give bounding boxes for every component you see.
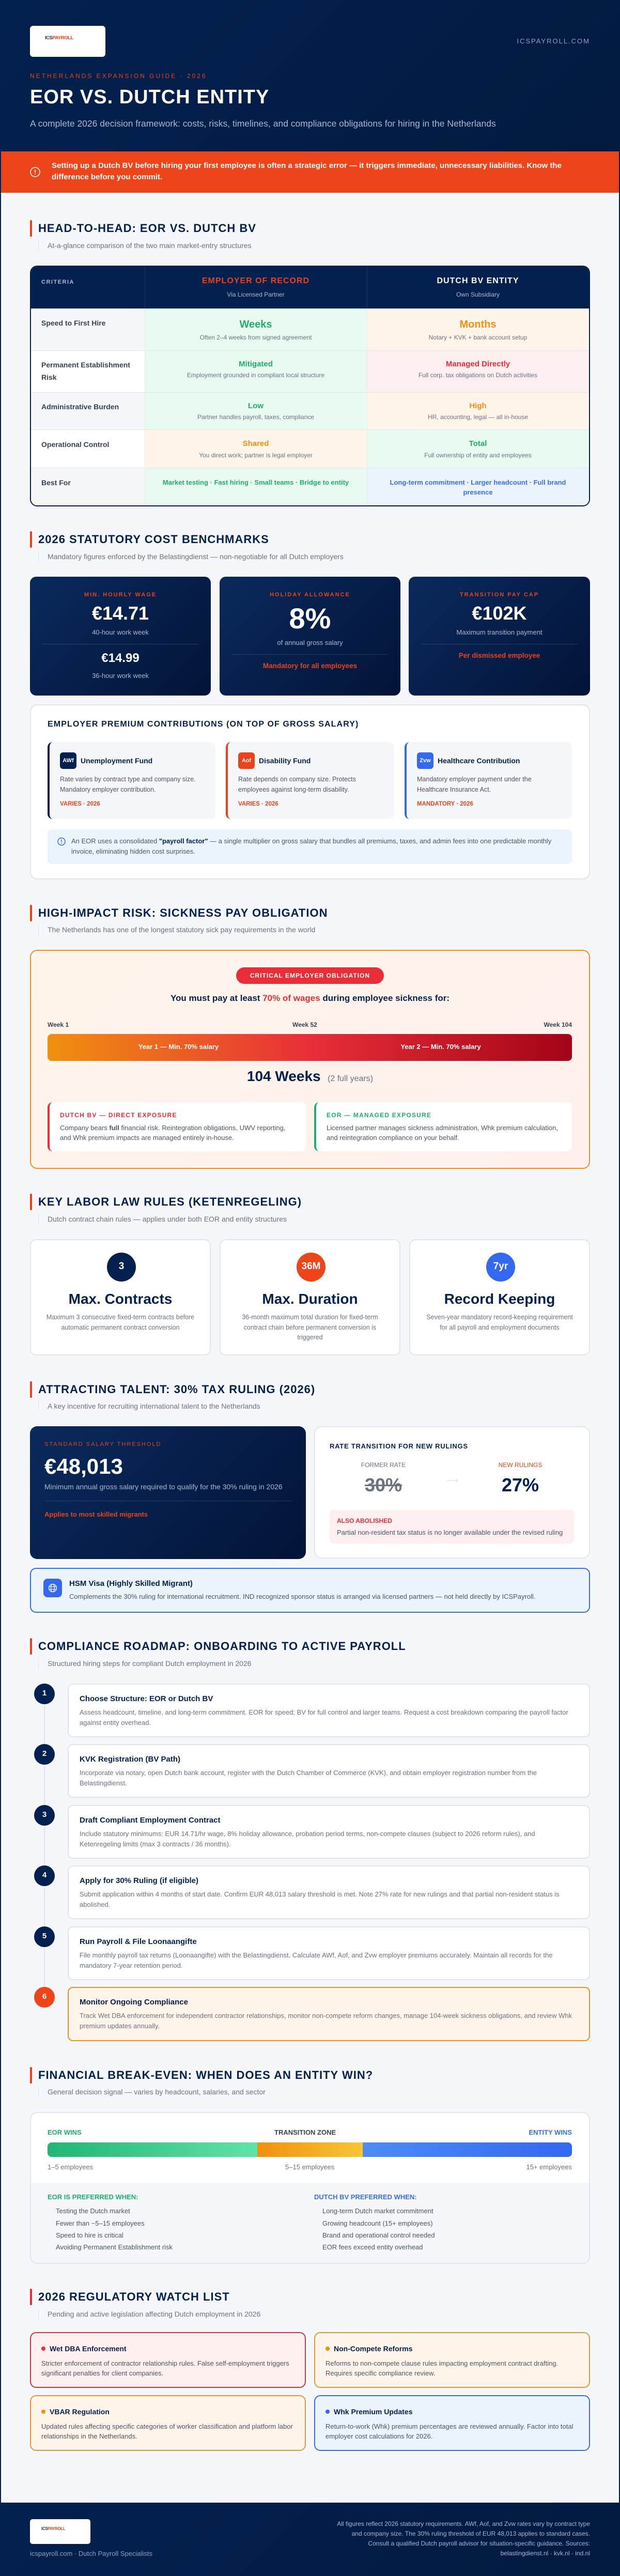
cell: best for entity: Long-term commitment · Larger headcount · Full brand [390,479,566,486]
premium card: AWf: VARIES · 2026 [60,801,100,807]
note: payroll factor: invoice, eliminating hidden cost surprises. [71,847,195,855]
step 3 number [34,1805,55,1826]
header: employer of record: Via Licensed Partner [227,291,285,298]
cell: best for entity: presence [463,488,493,496]
cell: high [367,393,589,430]
former rate: FORMER RATE [361,1461,406,1469]
badge: AWf [60,752,76,769]
premium card: Zvw [405,742,572,819]
cell: high: HR, accounting, legal — all in-house [428,413,528,421]
step 4 card: Apply for 30% Ruling (if eligible) [80,1876,198,1885]
stat card: min hourly wage: MIN. HOURLY WAGE [84,592,157,598]
row label: best for: Best For [41,479,71,487]
watch card: Whk: Whk Premium Updates [334,2408,412,2416]
cell: best for EOR: Market testing · Fast hiring · Small teams · Bridge to entity [163,479,349,486]
cell: managed directly: Full corp. tax obligations on Dutch activities [419,372,537,379]
step 6 card [68,1987,590,2041]
table header row [31,267,589,308]
cell: total [367,430,589,468]
rule card: max duration: 36-month maximum total duration for fixed-term [242,1314,378,1321]
callout: also abolished: ALSO ABOLISHED [337,1517,392,1524]
scale labels [48,2128,572,2136]
watch card: Wet DBA: Wet DBA Enforcement [50,2344,127,2353]
watch card: non-compete: Non-Compete Reforms [334,2344,412,2353]
timeline bar [48,1034,572,1061]
stat card: holiday allowance [220,577,400,696]
heading: statutory cost benchmarks: 2026 STATUTORY COST BENCHMARKS [38,533,269,546]
card: dutch bv exposure: Company bears full financial risk. Reintegration obligations, UWV reporting, [60,1124,285,1132]
card: dutch bv exposure: and Whk premium impacts are managed entirely in-house. [60,1134,234,1142]
row label: control: Operational Control [41,440,109,449]
stat card: min hourly wage: 40-hour work week [92,628,149,636]
EOR preferred list [48,2193,173,2251]
premium card: AWf: Rate varies by contract type and company size. [60,776,196,783]
watch card: VBAR: relationships in the Netherlands. [41,2432,137,2440]
icon: 7yr: 7yr [493,1261,508,1272]
preferred conditions [31,2183,589,2263]
logo [30,26,105,57]
premium card: AWf: Unemployment Fund [81,757,152,765]
EOR preferred list: Speed to hire is critical [56,2231,123,2239]
stat card: transition pay cap: €102K [472,603,527,624]
panel: salary threshold: Applies to most skilled migrants [44,1510,148,1518]
card: dutch bv exposure: DUTCH BV — DIRECT EXPOSURE [60,1112,177,1119]
premium card: Zvw: Healthcare Insurance Act. [417,786,491,793]
footer disclaimer: Consult a qualified Dutch payroll advisor for situation-specific guidance. Sources: [368,2540,590,2547]
threshold value: €48,013 [44,1454,123,1478]
rule card: max duration: triggered [297,1334,323,1341]
footer disclaimer: belastingdienst.nl · kvk.nl · ind.nl [501,2550,590,2557]
cell: low [145,393,367,430]
new rate: NEW RULINGS [499,1461,542,1469]
panel: rate transition: RATE TRANSITION FOR NEW RULINGS [330,1442,468,1450]
EOR preferred list: Testing the Dutch market [56,2207,130,2215]
footer [0,2503,620,2576]
rule card: max duration [220,1239,400,1355]
footer tagline: icspayroll.com · Dutch Payroll Specialists [30,2550,152,2557]
header: employer of record: EMPLOYER OF RECORD [202,276,309,285]
BV preferred list: EOR fees exceed entity overhead [322,2243,423,2251]
step 5 card [68,1926,590,1980]
cell: best for EOR [145,468,367,505]
card: eor exposure [314,1102,572,1151]
step 1 card [68,1684,590,1737]
row label: speed: Speed to First Hire [41,319,105,327]
watch card: Wet DBA: significant penalties for client companies. [41,2369,163,2377]
heading: sickness pay: HIGH-IMPACT RISK: SICKNESS PAY OBLIGATION [38,906,328,919]
step 1 number [34,1684,55,1704]
cell: low: Partner handles payroll, taxes, compliance [197,413,314,421]
stat card: holiday allowance: 8% [289,602,331,635]
step 6 card: Track Wet DBA enforcement for independent contractor relationships, monitor non-compete reform changes, manage 104-week sickness obligations, and review Whk [80,2012,572,2019]
cell: managed directly [367,351,589,392]
icon: 36M: 36M [302,1261,320,1272]
card: eor exposure: EOR — MANAGED EXPOSURE [327,1112,431,1119]
banner text: Setting up a Dutch BV before hiring your first employee is often a strategic error — it triggers immediate, unnecessary liabilities. Know the [52,161,562,170]
cell: total: Full ownership of entity and employees [424,452,532,459]
watch card: VBAR: Updated rules affecting specific categories of worker classification and platform labor [41,2423,293,2430]
step 6 number: 6 [42,1992,47,2001]
premium card: AWf [48,742,215,819]
timeline bar: Year 2 — Min. 70% salary [400,1043,481,1051]
banner text: difference before you commit. [52,173,162,181]
step 3 card [68,1805,590,1859]
step 2 number: 2 [42,1749,47,1758]
badge: Aof: Aof [242,758,251,764]
stat card: holiday allowance: HOLIDAY ALLOWANCE [270,592,350,598]
step 4 number: 4 [42,1871,47,1879]
cell: best for entity [367,468,589,505]
panel: sickness pay obligation [30,950,590,1169]
alert banner [1,151,619,193]
row label: PE risk: Risk [41,373,57,381]
watch card: non-compete: Reforms to non-compete clause rules impacting employment contract drafting. [326,2359,558,2367]
callout: HSM visa: Complements the 30% ruling for international recruitment. IND recognized sponsor status is arranged via licensed partners — not held directly by ICSPayroll. [69,1593,535,1600]
watch card: Wet DBA: Stricter enforcement of contractor relationship rules. False self-employment triggers [41,2359,289,2367]
section subtitle: A key incentive for recruiting international talent to the Netherlands [48,1402,260,1410]
logo: ICSPAYROLL [45,35,73,41]
cell: months [367,308,589,350]
cell: weeks: Weeks [239,319,272,330]
cell: low: Low [248,402,264,410]
banner text [52,161,562,181]
cell: mitigated: Employment grounded in compliant local structure [187,372,324,379]
badge: Zvw: Zvw [420,758,431,764]
step 1 card: Choose Structure: EOR or Dutch BV [80,1694,213,1703]
step 2 card [68,1744,590,1798]
watch card: VBAR [30,2395,306,2451]
panel: salary threshold: Minimum annual gross salary required to qualify for the 30% ruling in 2026 [44,1483,283,1491]
premium card: Aof: Disability Fund [259,757,311,765]
row label: PE risk [41,361,130,381]
stat card: transition pay cap: TRANSITION PAY CAP [460,592,539,598]
new rate: 27% [502,1474,539,1495]
badge: Zvw [417,752,433,769]
rule card: max duration: contract chain before permanent conversion is [244,1324,376,1331]
scale labels: TRANSITION ZONE [274,2128,336,2136]
stat card: holiday allowance: of annual gross salary [277,639,343,646]
subtitle: A complete 2026 decision framework: costs, risks, timelines, and compliance obligations for hiring in the Netherlands [30,118,496,129]
headcount labels: 15+ employees [526,2163,572,2171]
panel: rate transition [314,1426,590,1559]
badge: Aof [238,752,255,769]
premium card: Aof [226,742,394,819]
header band [0,0,620,151]
icon: 3: 3 [119,1261,124,1272]
statement: You must pay at least 70% of wages during employee sickness for: [171,993,450,1003]
step 4 number [34,1865,55,1886]
cell: high: High [469,402,487,410]
section subtitle: Pending and active legislation affecting Dutch employment in 2026 [48,2310,260,2318]
timeline labels: Week 104 [544,1021,572,1028]
stat card: holiday allowance: Mandatory for all employees [263,662,357,670]
BV preferred list: Brand and operational control needed [322,2231,435,2239]
callout: HSM visa: HSM Visa (Highly Skilled Migrant) [69,1579,193,1588]
premium card: Zvw: Mandatory employer payment under the [417,776,532,783]
header: employer of record [202,276,309,298]
watch card: non-compete [314,2332,590,2388]
cell: weeks [145,308,367,350]
callout: also abolished: Partial non-resident tax status is no longer available under the revised ruling [337,1529,563,1536]
callout: also abolished [330,1510,574,1544]
step 3 card: Ketenregeling limits (max 3 contracts / 36 months). [80,1840,231,1848]
stat card: transition pay cap: Per dismissed employee [459,652,540,659]
step 5 card: Run Payroll & File Loonaangifte [80,1937,197,1946]
table grid lines [31,350,589,351]
panel: employer premium contributions [30,704,590,880]
pill: critical obligation: CRITICAL EMPLOYER OBLIGATION [250,972,370,979]
header: dutch bv entity: DUTCH BV ENTITY [437,276,519,285]
watch card: VBAR: VBAR Regulation [50,2408,110,2416]
footer logo: ICSPAYROLL [41,2526,65,2531]
section subtitle: General decision signal — varies by headcount, salaries, and sector [48,2088,266,2096]
step 6 number [34,1987,55,2008]
title: EOR VS. DUTCH ENTITY [30,86,269,108]
stat card: min hourly wage: 36-hour work week [92,672,149,680]
step 3 card: Draft Compliant Employment Contract [80,1816,221,1825]
heading: head-to-head: HEAD-TO-HEAD: EOR VS. DUTCH BV [38,222,256,235]
row label backgrounds [31,308,145,505]
eyebrow label: NETHERLANDS EXPANSION GUIDE · 2026 [30,72,207,80]
footer disclaimer: All figures reflect 2026 statutory requirements. AWf, Aof, and Zvw rates vary by contract type [337,2520,590,2527]
watch card: Whk [314,2395,590,2451]
icon: globe [43,1579,62,1597]
watch card: non-compete: Requires specific compliance review. [326,2369,435,2377]
timeline labels: Week 1 [48,1021,69,1028]
rule card: record keeping: for all payroll and employment documents [440,1324,560,1331]
card: eor exposure: and reintegration compliance on your behalf. [327,1134,459,1142]
stat card: transition pay cap: Maximum transition payment [456,628,542,636]
note: payroll factor [48,829,572,864]
card: dutch bv exposure [48,1102,306,1151]
step 2 card: Belastingdienst. [80,1779,127,1787]
heading: financial break-even: FINANCIAL BREAK-EVEN: WHEN DOES AN ENTITY WIN? [38,2069,373,2081]
scale labels: ENTITY WINS [529,2128,572,2136]
panel: break-even [30,2112,590,2264]
cell: months: Months [459,319,497,330]
EOR preferred list: EOR IS PREFERRED WHEN: [48,2193,138,2201]
watch card: Whk: employer cost calculations for 2026. [326,2432,432,2440]
step 2 number [34,1744,55,1765]
rule card: max contracts: Maximum 3 consecutive fixed-term contracts before [47,1314,194,1321]
EOR preferred list: Fewer than ~5–15 employees [56,2219,145,2227]
step 3 card: Include statutory minimums: EUR 14.71/hr wage, 8% holiday allowance, probation period terms, non-compete clauses (subject to 2026 reform rules), and [80,1830,535,1838]
timeline labels: Week 52 [292,1021,317,1028]
step 2 card: KVK Registration (BV Path) [80,1755,180,1764]
step 5 card: mandatory 7-year retention period. [80,1962,182,1969]
heading: labor law rules: KEY LABOR LAW RULES (KETENREGELING) [38,1195,302,1208]
cell: shared [145,430,367,468]
heading: regulatory watch list: 2026 REGULATORY WATCH LIST [38,2290,230,2303]
cell: mitigated [145,351,367,392]
header: criteria: CRITERIA [41,279,74,285]
cell: mitigated: Mitigated [239,360,273,368]
break-even bar [48,2142,572,2157]
icon: warning [30,167,40,177]
premium card: Aof: VARIES · 2026 [238,801,278,807]
headcount labels: 5–15 employees [285,2163,334,2171]
cell: managed directly: Managed Directly [446,360,510,368]
rule card: max contracts: automatic permanent contract conversion [61,1324,180,1331]
row label: PE risk: Permanent Establishment [41,361,130,369]
premium card: AWf: Mandatory employer contribution. [60,786,156,793]
section subtitle: The Netherlands has one of the longest statutory sick pay requirements in the world [48,925,315,934]
cell: weeks: Often 2–4 weeks from signed agreement [200,334,312,341]
total duration: 104 Weeks (2 full years) [247,1068,373,1084]
stat card: min hourly wage: €14.71 [92,603,149,624]
icon: info [57,837,66,845]
stat card: min hourly wage [30,577,211,696]
watch card: Whk: Return-to-work (Whk) premium percentages are reviewed annually. Factor into total [326,2423,574,2430]
step 1 card: Assess headcount, timeline, and long-term commitment. EOR for speed; BV for full control and larger teams. Request a cost breakdown comparing the payroll factor [80,1708,568,1716]
headcount labels [48,2163,572,2171]
step 2 card: Incorporate via notary, open Dutch bank account, register with the Dutch Chamber of Commerce (KVK), and obtain employer registration number from the [80,1769,537,1777]
former rate [361,1461,406,1495]
note: payroll factor: An EOR uses a consolidated "payroll factor" — a single multiplier on gross salary that bundles all premiums, taxes, and admin fees into one predictable monthly [71,837,551,845]
headcount labels: 1–5 employees [48,2163,93,2171]
premium card: Zvw: MANDATORY · 2026 [417,801,473,807]
card: eor exposure: Licensed partner manages sickness administration, Whk premium calculation, [327,1124,558,1132]
step 4 card: Submit application within 4 months of start date. Confirm EUR 48,013 salary threshold is met. Note 27% rate for new rulings and that partial non-resident status is [80,1890,560,1898]
premium card: Zvw: Healthcare Contribution [438,757,520,765]
heading: compliance roadmap: COMPLIANCE ROADMAP: ONBOARDING TO ACTIVE PAYROLL [38,1640,406,1653]
BV preferred list: DUTCH BV PREFERRED WHEN: [314,2193,417,2201]
footer disclaimer [337,2520,590,2557]
rule card: record keeping: Record Keeping [444,1291,555,1307]
header: dutch bv entity: Own Subsidiary [456,291,500,298]
icon: arrow [447,1478,458,1483]
watch card: Wet DBA [30,2332,306,2388]
panel: salary threshold: STANDARD SALARY THRESHOLD [44,1441,161,1447]
icon: 7yr [486,1253,515,1282]
step 6 card: premium updates annually. [80,2022,160,2030]
heading: 30% tax ruling: ATTRACTING TALENT: 30% TAX RULING (2026) [38,1383,315,1396]
footer disclaimer: and company size. The 30% ruling threshold of EUR 48,013 applies to standard cases. [352,2530,590,2537]
premium card: Aof: employees against long-term disability. [238,786,349,793]
step 3 number: 3 [42,1810,47,1819]
section subtitle: At-a-glance comparison of the two main market-entry structures [48,241,251,250]
rule card: record keeping: Seven-year mandatory record-keeping requirement [426,1314,573,1321]
section subtitle: Mandatory figures enforced by the Belastingdienst — non-negotiable for all Dutch employers [48,552,344,561]
former rate: 30% [365,1474,402,1495]
step 5 number: 5 [42,1932,47,1940]
step 6 card: Monitor Ongoing Compliance [80,1998,188,2007]
new rate [499,1461,542,1495]
rule card: max contracts: Max. Contracts [69,1291,172,1307]
premium card: Aof: Rate depends on company size. Protects [238,776,356,783]
BV preferred list: Growing headcount (15+ employees) [322,2219,433,2227]
comparison table [30,266,590,506]
header: dutch bv entity [437,276,519,298]
icon: 3 [107,1253,136,1282]
step 4 card [68,1865,590,1919]
cell: months: Notary + KVK + bank account setup [429,334,527,341]
timeline labels [48,1021,572,1028]
timeline bar: Year 1 — Min. 70% salary [138,1043,219,1051]
footer logo [30,2519,90,2544]
EOR preferred list: Avoiding Permanent Establishment risk [56,2243,173,2251]
stat card: transition pay cap [409,577,590,696]
icon: 36M [297,1253,326,1282]
stat card: min hourly wage: €14.99 [101,651,140,665]
section subtitle: Structured hiring steps for compliant Dutch employment in 2026 [48,1659,252,1668]
scale labels: EOR WINS [48,2128,82,2136]
step 1 card: against entity overhead. [80,1719,151,1726]
BV preferred list: Long-term Dutch market commitment [322,2207,433,2215]
row label: admin burden: Administrative Burden [41,403,119,411]
badge: AWf: AWf [63,758,74,764]
BV preferred list [314,2193,435,2251]
step 1 number: 1 [42,1689,47,1698]
pill: critical obligation [236,967,384,984]
panel title: EMPLOYER PREMIUM CONTRIBUTIONS (ON TOP OF GROSS SALARY) [48,720,359,729]
panel: salary threshold [30,1426,306,1559]
cell: shared: Shared [243,439,269,448]
rule card: max contracts [30,1239,211,1355]
callout: HSM visa [30,1568,590,1613]
step 5 card: File monthly payroll tax returns (Loonaangifte) with the Belastingdienst. Calculate AWf, Aof, and Zvw employer premiums accurately. Maintain all records for the [80,1951,552,1959]
section subtitle: Dutch contract chain rules — applies under both EOR and entity structures [48,1215,287,1223]
rule card: record keeping [409,1239,590,1355]
cell: total: Total [469,439,487,448]
website url: ICSPAYROLL.COM [517,37,590,45]
step 5 number [34,1926,55,1947]
step 4 card: abolished. [80,1901,110,1908]
cell: shared: You direct work; partner is legal employer [199,452,313,459]
rule card: max duration: Max. Duration [262,1291,358,1307]
